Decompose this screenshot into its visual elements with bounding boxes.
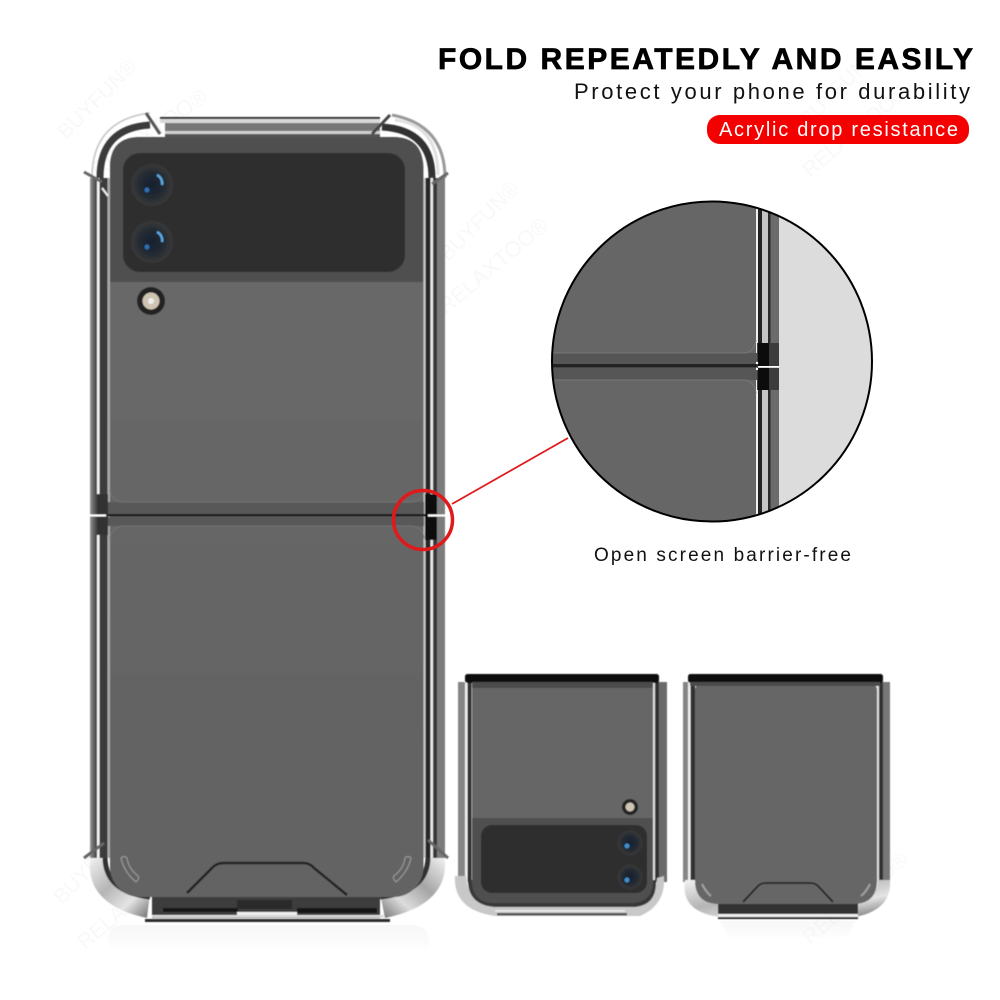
watermarks: RELAXTOO® [433, 213, 553, 319]
bottom bumper [455, 876, 664, 916]
top band [472, 682, 653, 688]
watermarks: BUYFUN® [802, 820, 891, 909]
camera panel [481, 825, 647, 893]
title: FOLD REPEATEDLY AND EASILY [438, 43, 973, 76]
right speaker mark [393, 856, 411, 882]
caption: Open screen barrier-free [594, 545, 851, 566]
icon: flash [622, 799, 638, 815]
right speaker mark [861, 884, 870, 896]
top corner bumpers [84, 113, 448, 196]
icon: lower lens [130, 220, 174, 264]
watermarks: RELAXTOO® [87, 84, 212, 182]
phone back panel [110, 137, 424, 897]
watermarks: BUYFUN® [795, 43, 884, 132]
floor reflection [108, 925, 430, 955]
red connector line [452, 438, 568, 504]
camera notch outline [187, 863, 347, 895]
side strips [683, 682, 890, 882]
left side strip [90, 178, 110, 858]
notch outline [743, 883, 833, 902]
back panel [472, 683, 653, 903]
bottom bumper [684, 880, 890, 919]
small phone: plain side [683, 674, 890, 940]
side strips [458, 682, 667, 882]
camera band [110, 137, 423, 282]
small phone: camera side [455, 674, 667, 916]
subtitle: Protect your phone for durability [574, 79, 970, 104]
main phone case [84, 113, 448, 955]
watermarks: BUYFUN® [49, 820, 138, 909]
bottom corner bumpers [84, 840, 448, 922]
watermarks: BUYFUN® [435, 177, 524, 266]
floor reflection [720, 921, 855, 940]
zoom detail circle [552, 201, 874, 523]
red badge: Acrylic drop resistance [719, 119, 958, 141]
icon: upper lens [130, 163, 174, 207]
camera panel [123, 153, 405, 272]
left speaker mark [702, 884, 711, 896]
left speaker mark [121, 856, 139, 882]
red badge [707, 115, 969, 144]
watermarks: RELAXTOO® [798, 848, 913, 949]
red marker circle [394, 490, 452, 550]
right side strip [423, 178, 445, 858]
back panel [695, 685, 877, 904]
watermarks: BUYFUN® [53, 55, 142, 144]
icon: lenses [617, 830, 643, 890]
watermarks: RELAXTOO® [798, 81, 913, 182]
top edge [160, 117, 380, 137]
top black bar [688, 674, 883, 683]
top black bar [465, 674, 659, 683]
camera band [472, 818, 653, 903]
hinge [88, 490, 446, 540]
watermarks [49, 43, 913, 954]
watermarks: RELAXTOO® [73, 853, 188, 954]
top band [690, 682, 880, 686]
icon: flash [137, 287, 165, 315]
